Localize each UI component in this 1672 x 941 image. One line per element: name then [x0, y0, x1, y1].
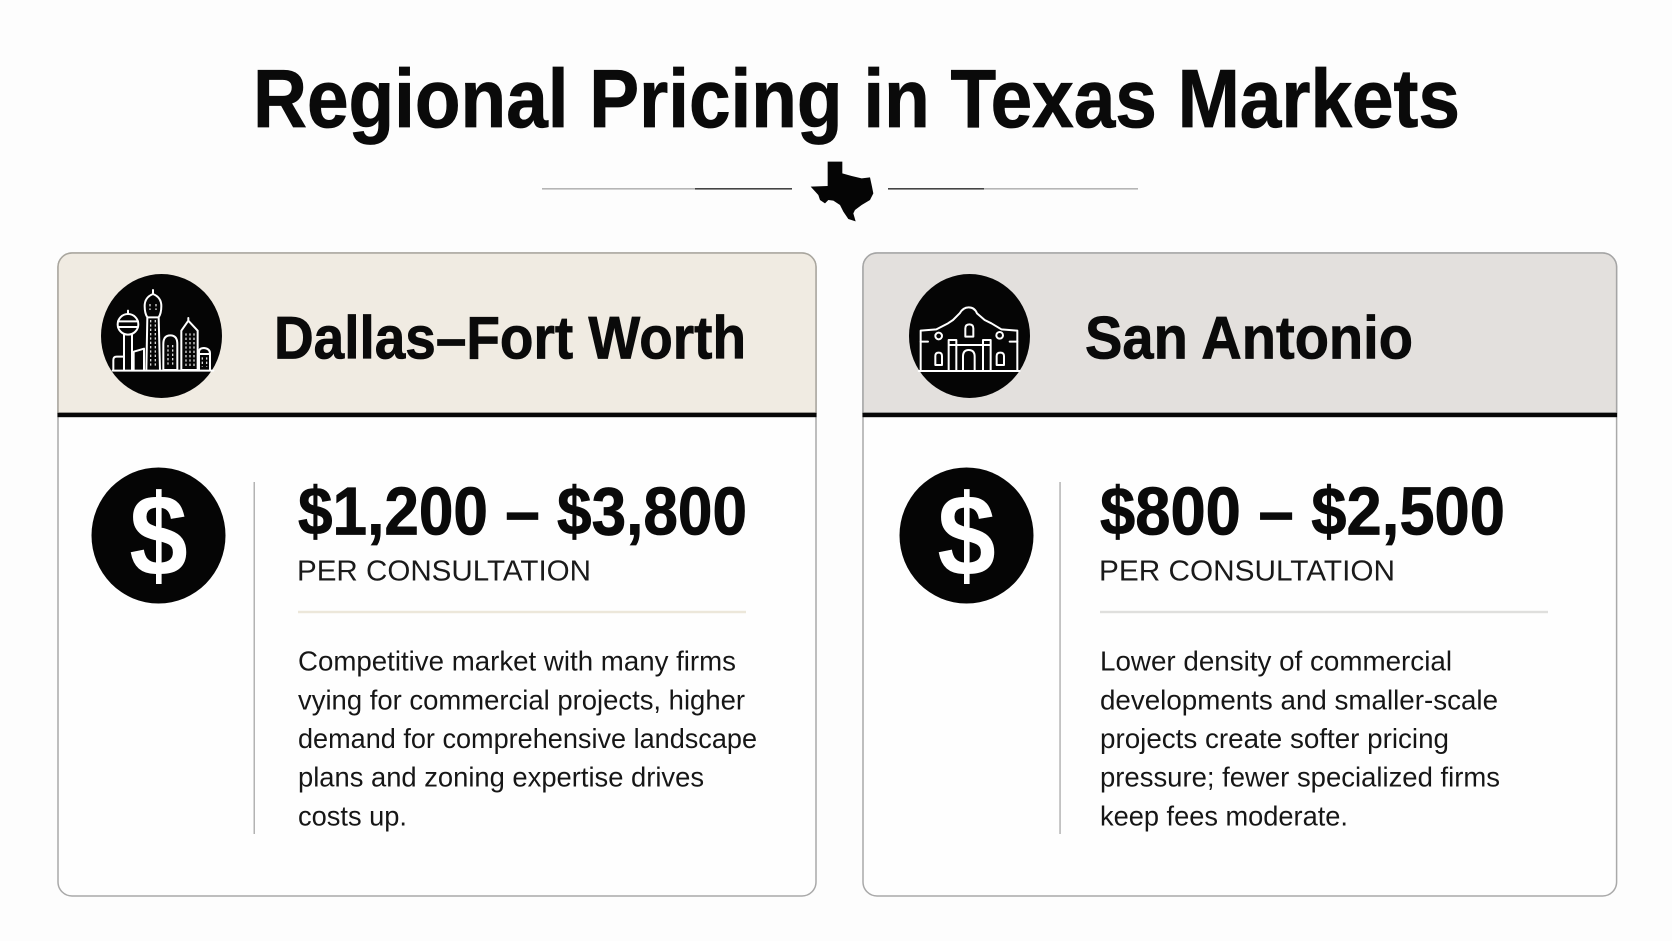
icon: dollar coin: $: [937, 472, 996, 601]
icon: Dallas skyline: [101, 274, 222, 398]
panel header: Dallas–Fort Worth: [58, 253, 816, 417]
icon: the Alamo: [909, 274, 1030, 398]
description text: costs up.: [298, 800, 407, 831]
price unit: PER CONSULTATION: [297, 556, 591, 588]
description text: projects create softer pricing: [1100, 723, 1449, 754]
icon: dollar coin: $: [129, 472, 188, 601]
heading: San Antonio: San Antonio: [1085, 304, 1413, 372]
icon: dollar coin: [900, 468, 1034, 604]
description text: demand for comprehensive landscape: [298, 723, 757, 754]
title: Regional Pricing in Texas Markets: [253, 52, 1460, 145]
description text: developments and smaller-scale: [1100, 684, 1498, 715]
description text: plans and zoning expertise drives: [298, 762, 704, 793]
description text: pressure; fewer specialized firms: [1100, 762, 1500, 793]
description text: Lower density of commercial: [1100, 646, 1452, 676]
title divider with Texas icon: [542, 162, 1138, 221]
description text: vying for commercial projects, higher: [298, 684, 745, 715]
icon: Texas silhouette: [811, 162, 873, 221]
description text: [1100, 646, 1500, 831]
price unit: PER CONSULTATION: [1099, 556, 1395, 588]
icon: dollar coin: [92, 468, 226, 604]
description text: Competitive market with many firms: [298, 646, 736, 676]
heading: Dallas–Fort Worth: Dallas–Fort Worth: [274, 304, 746, 372]
description text: [298, 646, 757, 831]
panel header: San Antonio: [862, 253, 1617, 417]
price range: $800 – $2,500: [1100, 474, 1505, 550]
panel: Dallas–Fort Worth: [58, 253, 816, 896]
description text: keep fees moderate.: [1100, 800, 1348, 831]
price range: $1,200 – $3,800: [298, 474, 747, 550]
panel: San Antonio: [862, 253, 1617, 896]
